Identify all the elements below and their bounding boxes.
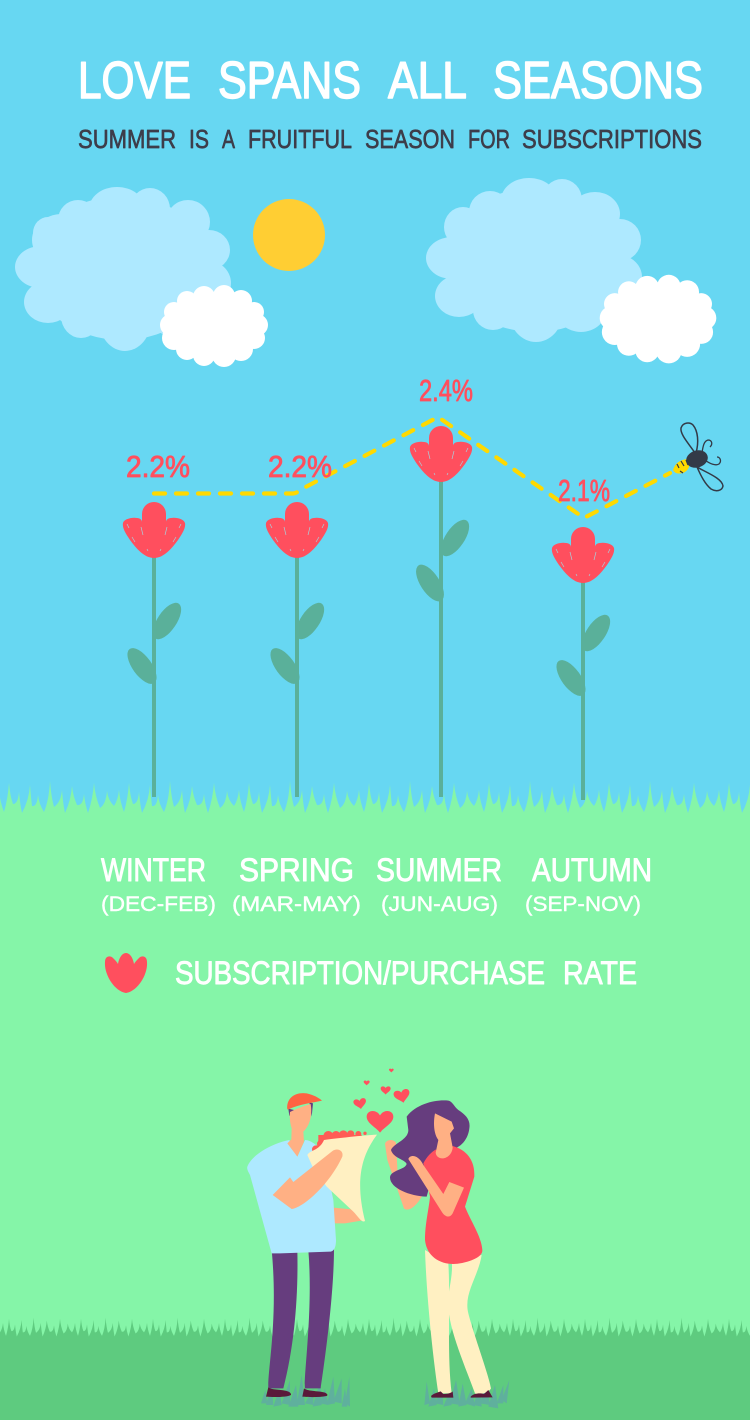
man cap (287, 1093, 322, 1109)
heart small (364, 1080, 370, 1085)
subtitle: SUMMER (78, 124, 176, 154)
bouquet (307, 1130, 377, 1221)
title: SEASONS (493, 52, 703, 110)
months: summer: (JUN-AUG) (381, 893, 498, 916)
hearts (353, 1069, 411, 1133)
woman shoes (431, 1390, 493, 1398)
subtitle: IS (189, 124, 209, 154)
man shoes (266, 1387, 327, 1397)
value label: spring: 2.2% (268, 449, 332, 484)
months: autumn: (SEP-NOV) (525, 893, 641, 916)
label: winter: WINTER (101, 852, 206, 888)
subtitle (78, 124, 702, 154)
flower: autumn (551, 527, 616, 800)
months: spring: (MAR-MAY) (232, 893, 361, 916)
subtitle: A (222, 124, 235, 154)
title: ALL (388, 52, 467, 110)
couple illustration (247, 1069, 509, 1408)
heart mid (381, 1086, 391, 1094)
heart right (393, 1088, 411, 1104)
label: summer: SUMMER (376, 852, 502, 888)
heart left (353, 1098, 367, 1110)
bouquet paper (307, 1135, 377, 1221)
flower: spring (265, 502, 330, 797)
cloud: right white (600, 275, 716, 363)
value label: summer: 2.4% (419, 373, 473, 408)
woman (385, 1100, 493, 1398)
dashed flight line (154, 417, 670, 518)
subtitle: SEASON (365, 124, 455, 154)
heart large (367, 1111, 393, 1133)
woman dress (423, 1146, 482, 1264)
value label: winter: 2.2% (126, 449, 190, 484)
woman face and neck (434, 1113, 454, 1158)
title: SPANS (218, 52, 361, 110)
subtitle: FOR (468, 124, 510, 154)
woman legs (425, 1250, 491, 1394)
sky background (0, 0, 750, 815)
label: autumn: AUTUMN (532, 852, 652, 888)
woman hair (390, 1100, 470, 1197)
bouquet flowers (312, 1130, 367, 1153)
man hair (288, 1102, 313, 1117)
man far hand (333, 1208, 365, 1223)
man shirt (247, 1140, 336, 1253)
cloud: left light blue (15, 187, 231, 351)
grass: upper meadow (0, 780, 750, 1338)
man near arm (273, 1149, 343, 1209)
flower: winter (122, 502, 187, 797)
cloud: right light blue (426, 178, 642, 342)
grass: foreground (0, 1317, 750, 1420)
value label: autumn: 2.1% (558, 473, 610, 508)
flower: summer (410, 426, 475, 797)
cloud: left white (160, 285, 268, 367)
icon: legend flower (105, 953, 147, 993)
subtitle: FRUITFUL (248, 124, 352, 154)
woman far arm (385, 1140, 423, 1210)
season labels (101, 852, 652, 916)
legend text: RATE (563, 955, 637, 991)
title: LOVE (78, 52, 191, 110)
icon: bee (673, 423, 723, 491)
legend text: SUBSCRIPTION/PURCHASE (175, 955, 545, 991)
heart tiny (389, 1069, 394, 1072)
title (78, 52, 703, 110)
woman near arm (408, 1156, 464, 1217)
months: winter: (DEC-FEB) (101, 893, 216, 916)
man (247, 1093, 365, 1397)
label: spring: SPRING (239, 852, 354, 888)
subtitle: SUBSCRIPTIONS (522, 124, 702, 154)
man head and neck (287, 1104, 311, 1157)
sun (253, 199, 325, 271)
grass tufts at feet (261, 1375, 509, 1408)
man trousers (268, 1248, 334, 1388)
